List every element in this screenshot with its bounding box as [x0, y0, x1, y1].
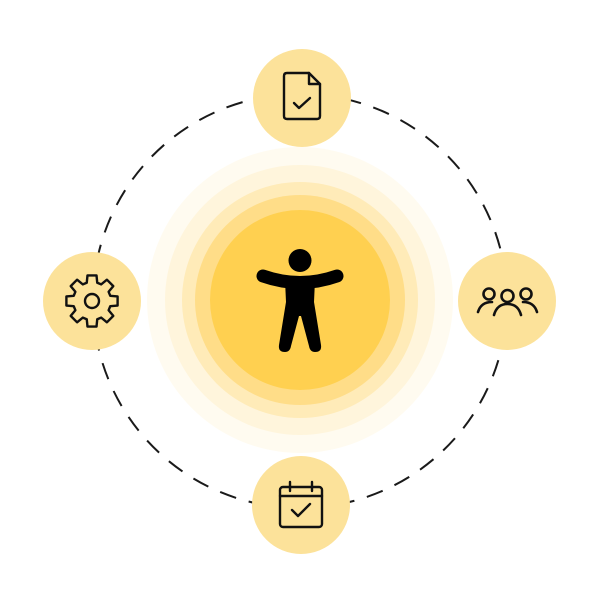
- icon: document with check: [284, 73, 320, 119]
- node: document (top): [253, 49, 351, 147]
- node: calendar (bottom): [252, 456, 350, 554]
- icon: calendar with check: [280, 482, 322, 527]
- node: people (right): [458, 252, 556, 350]
- node: settings (left): [43, 252, 141, 350]
- icon: accessibility figure: [263, 249, 337, 352]
- central glow circles: [147, 147, 453, 453]
- icon: group of people: [478, 288, 537, 315]
- icon: gear: [66, 275, 118, 327]
- dashed orbit ring: [93, 94, 507, 508]
